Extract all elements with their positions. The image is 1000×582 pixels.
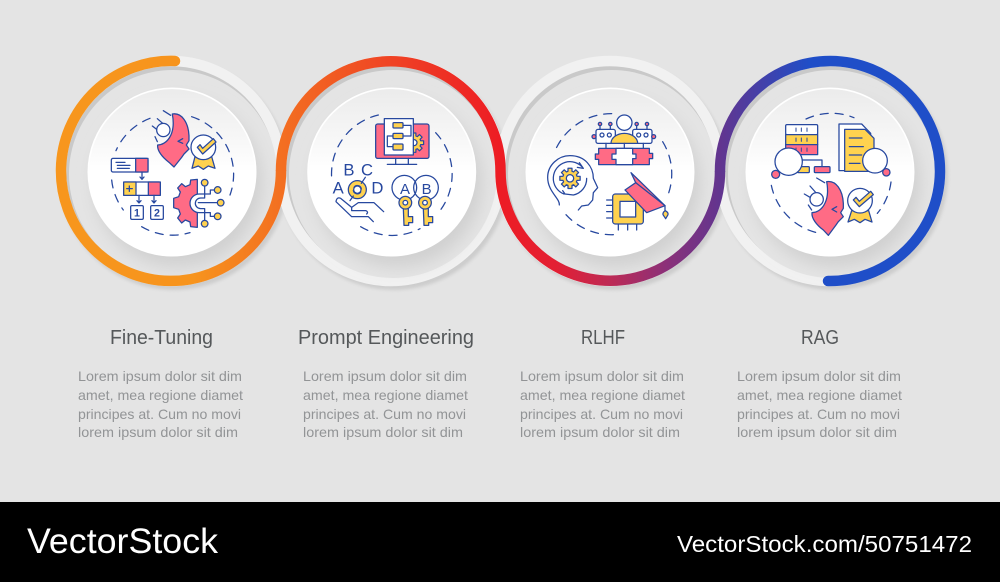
decision boxes — [111, 158, 163, 220]
column 3 text: amet, mea regione diamet — [520, 387, 685, 403]
circle base 1 — [59, 60, 289, 290]
column 3 text: principes at. Cum no movi — [520, 406, 683, 422]
face — [158, 114, 189, 167]
column 1 text: Lorem ipsum dolor sit dim — [78, 368, 242, 384]
icon: RLHF — [548, 114, 672, 235]
head with gear — [548, 156, 598, 210]
alphabet and sync in hand — [333, 161, 384, 222]
icon: RAG — [771, 113, 891, 235]
column 3 text: lorem ipsum dolor sit dim — [520, 424, 680, 440]
footer bar — [0, 502, 1000, 582]
graduation cap — [625, 173, 668, 219]
footer id: VectorStock.com/50751472 — [677, 531, 972, 557]
column 2 text: principes at. Cum no movi — [303, 406, 466, 422]
gradient timeline ribbon — [61, 61, 940, 281]
column 1 text: principes at. Cum no movi — [78, 406, 241, 422]
keys: A — [400, 181, 410, 198]
decision boxes: 1 — [134, 208, 140, 220]
keys — [392, 175, 438, 225]
puzzle — [595, 148, 653, 165]
keys: B — [422, 181, 432, 198]
column 2 text: Prompt Engineering — [298, 327, 474, 349]
badge — [191, 135, 216, 169]
column 2 text: amet, mea regione diamet — [303, 387, 468, 403]
monitor — [376, 119, 429, 164]
column 4 text: amet, mea regione diamet — [737, 387, 902, 403]
column 3 text: Lorem ipsum dolor sit dim — [520, 368, 684, 384]
documents — [839, 124, 890, 176]
column 2 text — [298, 327, 474, 440]
column 1 text — [78, 327, 243, 440]
circle base 4 — [718, 60, 948, 290]
face sensor — [152, 111, 183, 143]
column 3 text: RLHF — [581, 327, 625, 349]
white disc 1 — [88, 88, 262, 267]
badge — [848, 188, 873, 223]
column 3 text — [520, 327, 685, 440]
database — [772, 125, 830, 178]
alphabet and sync in hand: B — [343, 161, 354, 180]
column 4 text: principes at. Cum no movi — [737, 406, 900, 422]
column 1 text: amet, mea regione diamet — [78, 387, 243, 403]
alphabet and sync in hand: D — [371, 178, 383, 197]
column 4 text: Lorem ipsum dolor sit dim — [737, 368, 901, 384]
white disc 2 — [308, 88, 482, 267]
face — [804, 178, 843, 235]
white disc 3 — [526, 88, 700, 267]
column 2 text: Lorem ipsum dolor sit dim — [303, 368, 467, 384]
gear with circuit — [174, 179, 224, 227]
chip — [607, 194, 643, 230]
white disc 4 — [746, 88, 920, 267]
alphabet and sync in hand: A — [333, 178, 345, 197]
alphabet and sync in hand: C — [361, 161, 373, 180]
decision boxes: 2 — [154, 208, 160, 220]
footer logo: VectorStock — [27, 522, 219, 561]
column 2 text: lorem ipsum dolor sit dim — [303, 424, 463, 440]
icon: fine-tuning — [111, 111, 234, 235]
circle base 3 — [498, 60, 728, 290]
column 4 text — [737, 327, 902, 440]
column 4 text: RAG — [801, 327, 839, 349]
team of human and robots — [592, 115, 656, 148]
column 1 text: lorem ipsum dolor sit dim — [78, 424, 238, 440]
circle base 2 — [279, 60, 509, 290]
column 1 text: Fine-Tuning — [110, 327, 213, 349]
column 4 text: lorem ipsum dolor sit dim — [737, 424, 897, 440]
icon: prompt engineering — [332, 115, 452, 235]
